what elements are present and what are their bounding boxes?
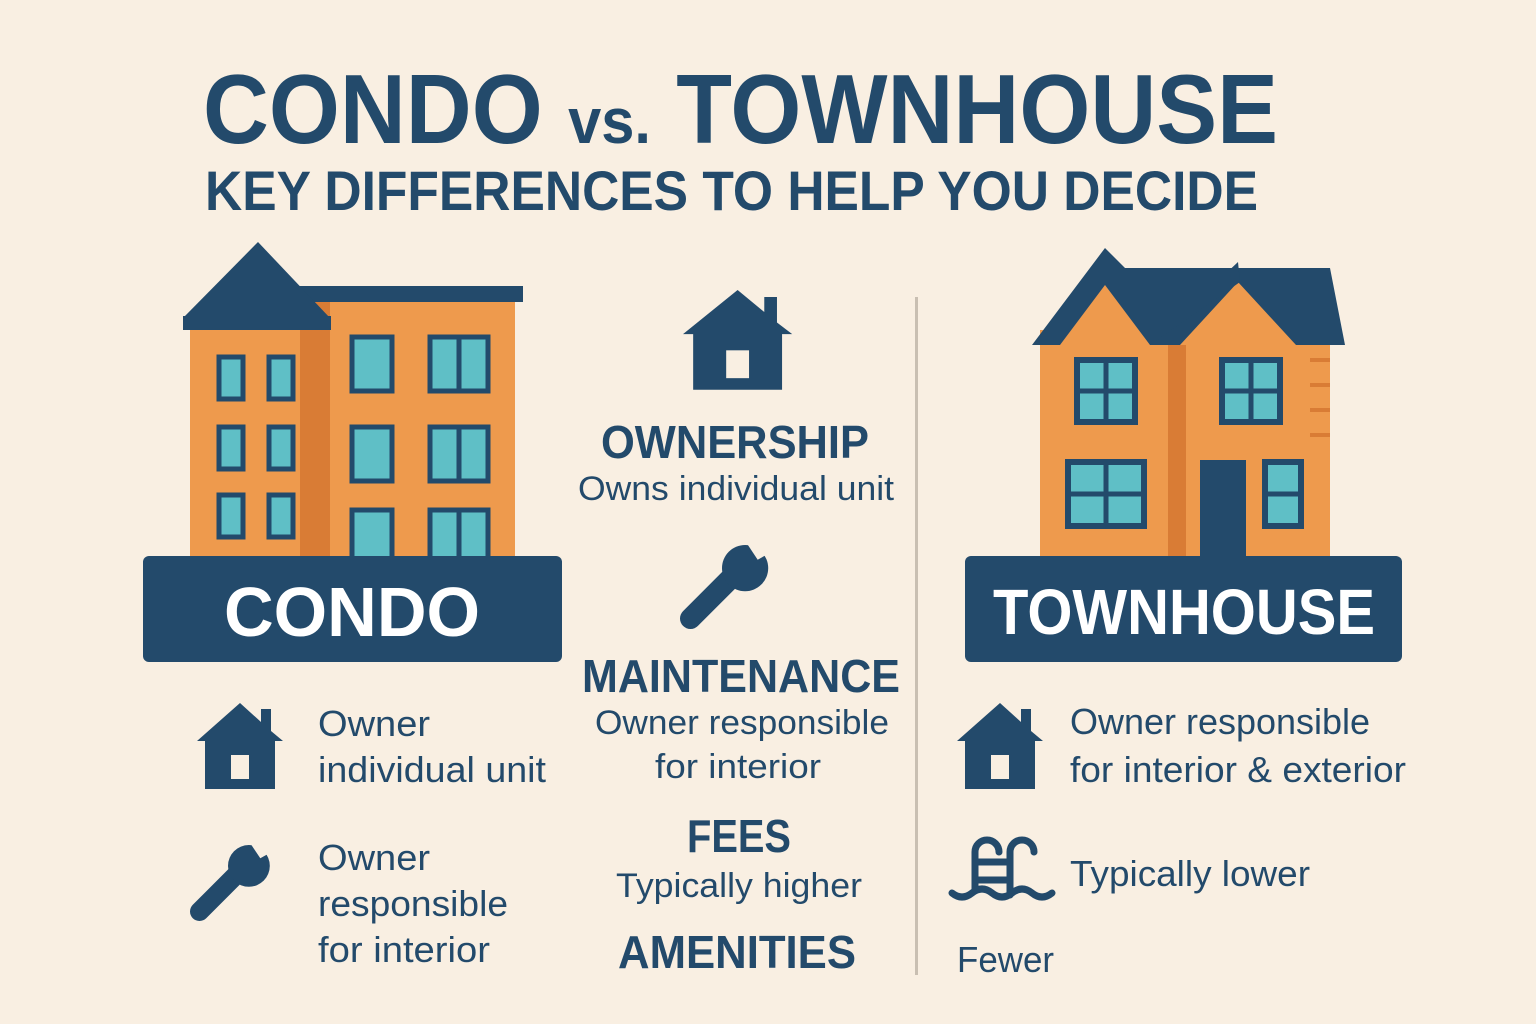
divider: [915, 297, 918, 975]
townhouse building: [1032, 248, 1345, 556]
right list: Fewer: [957, 939, 1054, 980]
right list: [952, 701, 1406, 980]
middle column: for interior: [655, 748, 821, 786]
middle column: MAINTENANCE: [582, 650, 900, 702]
left list: Owner: [318, 703, 430, 744]
left list: Owner: [318, 837, 430, 878]
left list: [197, 703, 546, 970]
icon: house middle: [683, 290, 792, 390]
right list: Typically lower: [1070, 853, 1310, 894]
title: CONDO vs. TOWNHOUSE: [203, 54, 1278, 164]
icon: wrench middle: [690, 537, 777, 618]
right list: for interior & exterior: [1070, 749, 1406, 790]
middle column: Owner responsible: [595, 704, 889, 742]
townhouse banner: [965, 556, 1402, 662]
middle column: AMENITIES: [618, 926, 856, 978]
right list: Owner responsible: [1070, 701, 1370, 742]
left list: individual unit: [318, 749, 546, 790]
icon: pool: [952, 840, 1052, 897]
middle column: Owns individual unit: [578, 470, 895, 508]
subtitle: KEY DIFFERENCES TO HELP YOU DECIDE: [205, 159, 1258, 222]
middle column: [578, 290, 900, 978]
middle column: OWNERSHIP: [601, 416, 869, 468]
left list: for interior: [318, 929, 490, 970]
middle column: FEES: [687, 810, 791, 862]
condo banner: [143, 556, 562, 662]
middle column: Typically higher: [616, 867, 862, 905]
condo building: [183, 242, 523, 560]
left list: responsible: [318, 883, 508, 924]
townhouse banner: TOWNHOUSE: [993, 576, 1375, 648]
condo banner: CONDO: [224, 573, 480, 651]
